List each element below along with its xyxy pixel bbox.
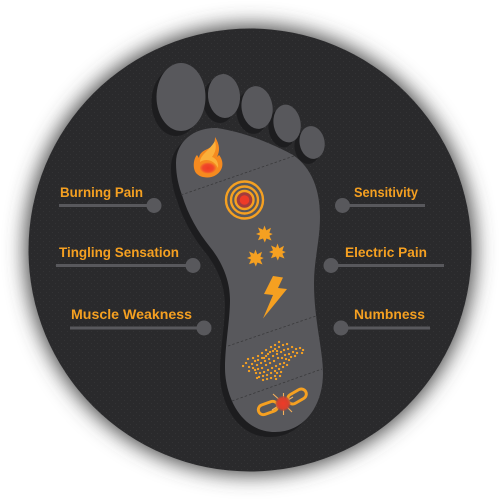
label: Electric Pain: Electric Pain — [345, 245, 427, 260]
label: Numbness: Numbness — [354, 307, 425, 322]
sole — [176, 128, 323, 432]
label: Muscle Weakness — [70, 307, 212, 336]
dark circular background — [28, 28, 472, 472]
label: Muscle Weakness: Muscle Weakness — [71, 307, 192, 322]
sole dashed dividers — [181, 156, 322, 401]
label: Tingling Sensation: Tingling Sensation — [59, 245, 179, 260]
icon: stars — [247, 226, 286, 266]
label: Numbness — [334, 307, 430, 336]
label: Sensitivity — [335, 185, 425, 213]
icon: broken chain — [257, 387, 308, 416]
toes — [156, 63, 327, 161]
label: Burning Pain — [59, 185, 162, 213]
label: Tingling Sensation — [56, 245, 200, 273]
foot illustration — [152, 63, 327, 437]
icon: flame — [194, 137, 222, 177]
label: Burning Pain: Burning Pain — [60, 185, 143, 200]
label: Electric Pain — [324, 245, 444, 273]
icon: target — [226, 182, 263, 218]
icon: numbness specks — [243, 342, 303, 380]
foot shadow — [152, 68, 322, 437]
label: Sensitivity: Sensitivity — [354, 185, 418, 200]
icon: lightning bolt — [263, 276, 287, 318]
